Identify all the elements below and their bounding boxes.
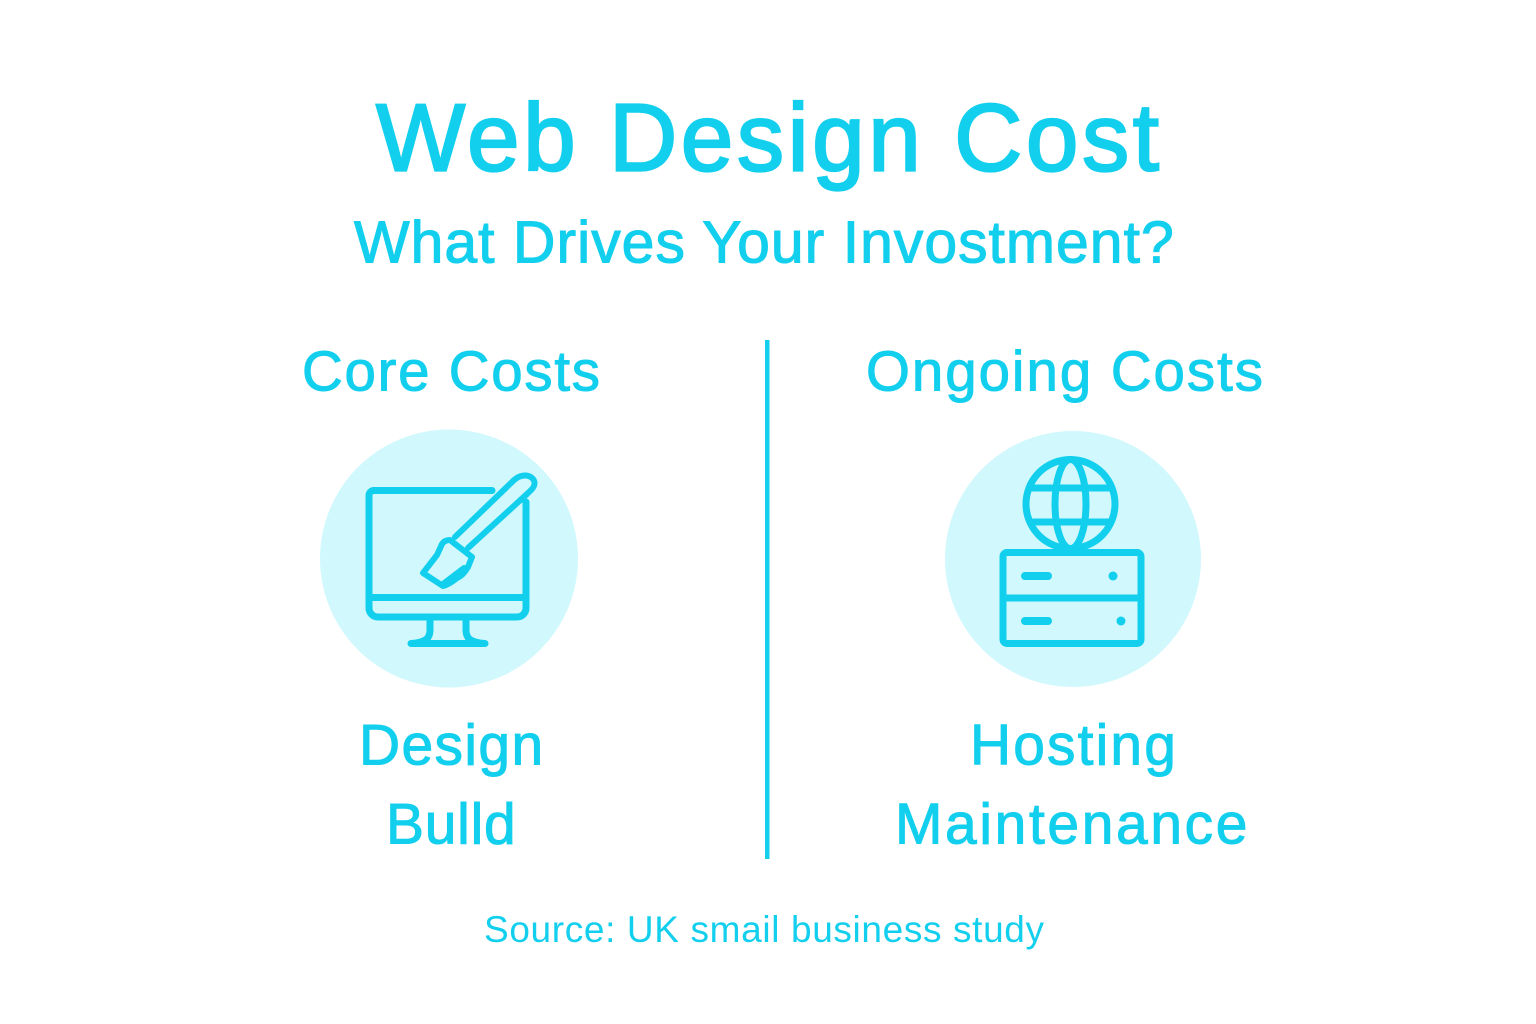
label: build: Bulld <box>386 792 516 857</box>
label: design: Design <box>359 713 543 778</box>
center divider <box>765 340 770 859</box>
label: maintenance: Maintenance <box>895 792 1247 857</box>
icon: monitor with paintbrush <box>320 430 578 688</box>
icon: globe on server <box>945 431 1201 687</box>
heading: core costs: Core Costs <box>302 340 600 404</box>
source note: Source: UK smail business study <box>484 909 1044 950</box>
title: Web Design Cost <box>376 85 1159 192</box>
heading: ongoing costs: Ongoing Costs <box>866 340 1263 404</box>
label: hosting: Hosting <box>970 713 1176 778</box>
subtitle: What Drives Your Invostment? <box>354 208 1174 276</box>
